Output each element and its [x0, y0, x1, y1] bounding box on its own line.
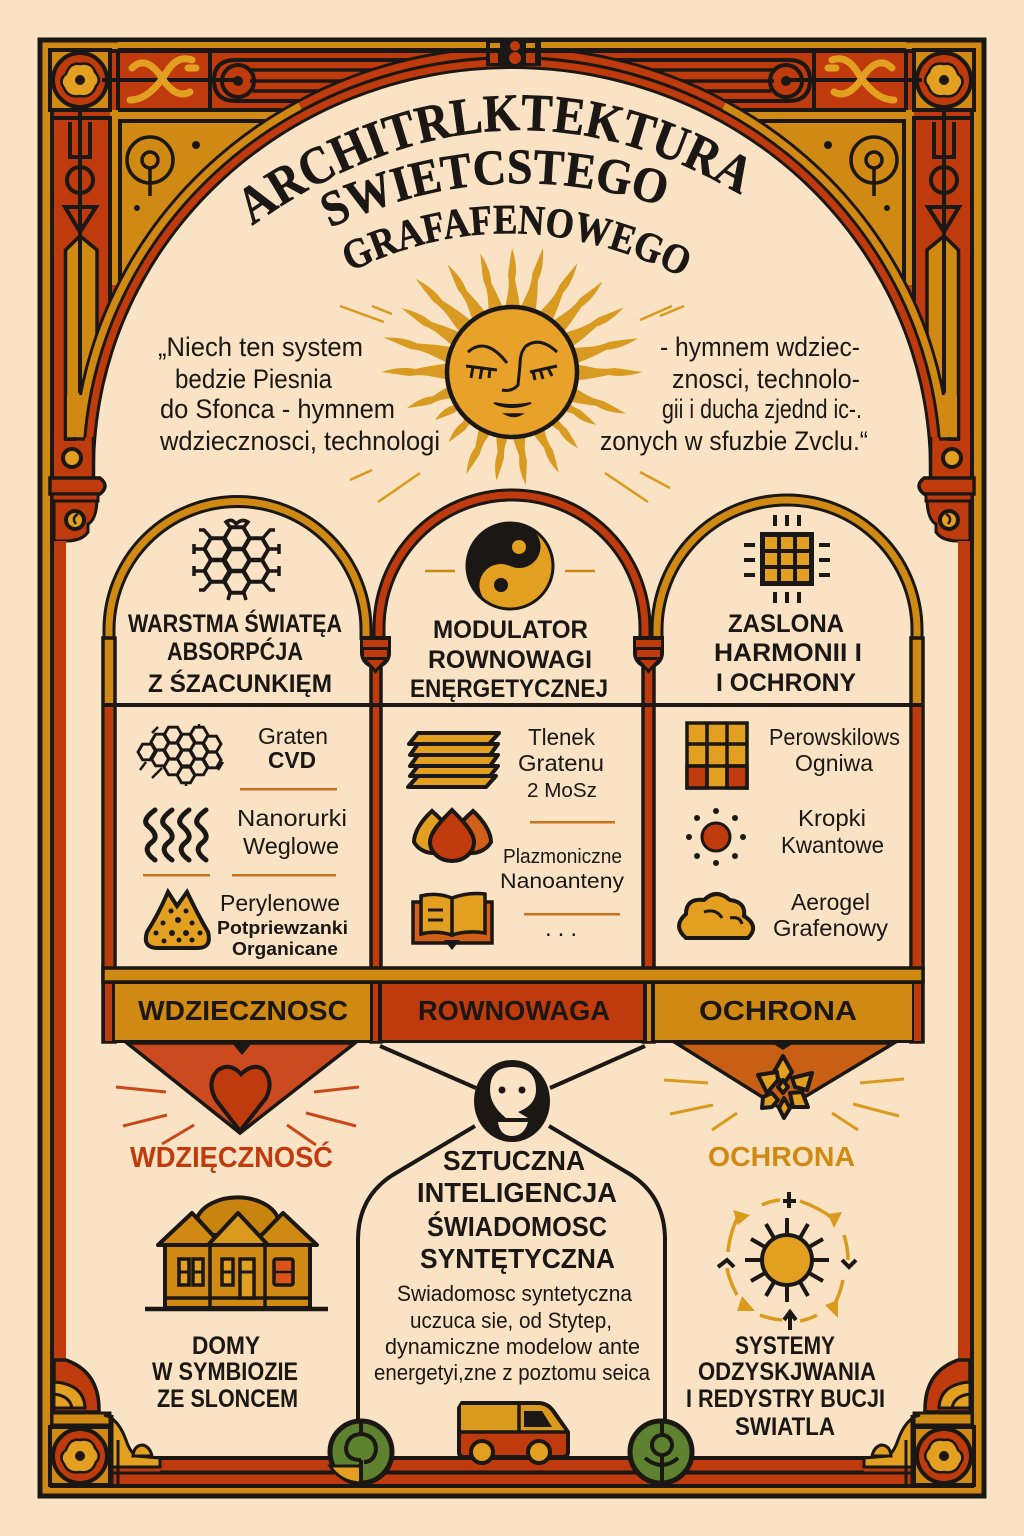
capital: right: [919, 395, 974, 547]
item text: Perylenowe: [217, 890, 348, 959]
title: GRAFAFENOWEGO: [344, 206, 690, 274]
item text: Aerogel: Aerogel: [791, 889, 870, 915]
heading: I OCHRONY: [716, 669, 856, 697]
left caption: [152, 1332, 298, 1413]
medallion: green right: [630, 1421, 692, 1483]
panel: left arch: [128, 520, 348, 959]
panel: central arch: [358, 1126, 665, 1425]
item text: Perylenowe: Potpriewzanki: [217, 918, 348, 938]
top frame stripes: [118, 38, 906, 53]
bottom border band: [52, 1458, 972, 1488]
icon: plasmonic drops: [414, 810, 491, 861]
icon: graphene hexagons: [194, 520, 279, 600]
item text: Nanorurki Weglowe: Weglowe: [243, 833, 339, 859]
triple arcade frame: [103, 495, 923, 1042]
item text: Tlenek: 2 MoSz: [527, 780, 597, 802]
item text: Perowskilows: [769, 724, 900, 776]
sun sparks: [340, 306, 684, 502]
quote: left: wdziecznosci, technologi: [159, 426, 440, 456]
ornament: bottom right corner: [864, 1360, 974, 1485]
item text: Graten CVD: CVD: [268, 747, 316, 773]
item text: Perowskilows: Ogniwa: [795, 750, 873, 776]
item text: Graten CVD: Graten: [258, 723, 328, 749]
pendant: flower: [676, 1043, 894, 1118]
rays around heart: [116, 1087, 359, 1145]
body text: dynamiczne modelow ante: [385, 1334, 640, 1359]
heading: ENĘRGETYCZNEJ: [410, 675, 608, 703]
banner label: Wdziecznosc: WDZIECZNOSC: [138, 995, 348, 1026]
item text: Kropki: Kropki: [798, 805, 866, 831]
item text: Tlenek: Gratenu: [518, 750, 604, 776]
heading: [128, 608, 342, 698]
left caption: W SYMBIOZIE: [152, 1358, 298, 1386]
banner label: Ochrona: OCHRONA: [699, 995, 857, 1026]
heading: [410, 616, 608, 703]
capital: left: [50, 395, 105, 547]
item text: Aerogel: [773, 889, 889, 941]
heading: MODULATOR: [433, 616, 588, 644]
arch: left: [109, 502, 366, 640]
right caption: [686, 1332, 885, 1441]
ornament: top right corner: [504, 50, 974, 445]
item text: Perylenowe: Organicane: [232, 939, 338, 959]
item text: Tlenek: Tlenek: [528, 724, 595, 750]
quote: right: znosci, technolo-: [672, 364, 860, 394]
ellipsis: . . .: [545, 915, 577, 942]
icon: light recovery cycle: [718, 1192, 856, 1330]
quote: right: zonych w sfuzbie Zvclu.“: [600, 426, 868, 456]
heading: [714, 610, 862, 697]
ornament: bottom left corner: [50, 1360, 160, 1485]
item text: Kropki: [781, 805, 884, 858]
heading: ZASLONA: [728, 610, 844, 638]
body text: uczuca sie, od Stytep,: [410, 1308, 612, 1333]
body text: Swiadomosc syntetyczna: [397, 1281, 633, 1306]
item text: Plazmoniczne: Nanoanteny: [500, 870, 625, 893]
icon: carbon nanotubes: [146, 810, 206, 860]
icon: perylene pile: [146, 892, 209, 948]
left caption: ZE SLONCEM: [157, 1385, 298, 1413]
heading: INTELIGENCJA: [417, 1177, 617, 1208]
rays around flower: [664, 1079, 904, 1130]
pendant: heart: [127, 1043, 355, 1133]
quote: left: do Sfonca - hymnem: [160, 394, 395, 424]
item text: Plazmoniczne: [500, 846, 625, 893]
heading: WARSTMA ŚWIATĘA: [128, 608, 342, 638]
heading: [417, 1145, 617, 1274]
item text: Nanorurki Weglowe: Nanorurki: [237, 805, 347, 831]
icon: crumpled CVD graphene: [138, 724, 223, 786]
icon: house: [145, 1197, 328, 1309]
icon: perovskite grid: [687, 723, 747, 788]
item text: Tlenek: [518, 724, 604, 802]
icon: delivery van: [459, 1403, 568, 1463]
ornament: top left corner: [50, 50, 520, 445]
icon: aerogel cloud: [679, 894, 753, 938]
left caption: DOMY: [192, 1332, 260, 1360]
right caption: I REDYSTRY BUCJI: [686, 1385, 885, 1413]
heading: Z ŚZACUNKIĘM: [148, 668, 332, 698]
title: ARCHITRLKTEKTURA: [244, 94, 746, 226]
medallion: green left: [330, 1421, 392, 1483]
quote: left: „Niech ten system: [158, 332, 363, 362]
right caption: SWIATLA: [735, 1413, 835, 1441]
right caption: SYSTEMY: [735, 1332, 835, 1360]
quote: right: - hymnem wdziec-: [660, 332, 860, 362]
heading: HARMONII I: [714, 639, 862, 667]
heading: ROWNOWAGI: [428, 646, 592, 674]
quote: left: [158, 332, 440, 456]
item text: Plazmoniczne: Plazmoniczne: [503, 846, 622, 868]
icon: open book: [413, 894, 492, 950]
central figure: AI head: [380, 1046, 645, 1142]
item text: Perylenowe: Perylenowe: [220, 890, 340, 916]
quote: left: bedzie Piesnia: [175, 364, 333, 394]
quote: right: [600, 332, 868, 456]
heading: SZTUCZNA: [443, 1145, 585, 1176]
item text: Aerogel: Grafenowy: [773, 915, 889, 941]
body text: energetyi,zne z poztomu seica: [374, 1360, 651, 1385]
icon: graphene oxide layers: [408, 733, 499, 787]
heading: SYNTĘTYCZNA: [420, 1243, 615, 1274]
columns: [103, 636, 923, 1042]
arch: centre: [379, 495, 645, 640]
banner label: Rownowaga: ROWNOWAGA: [418, 995, 610, 1026]
right heading: Ochrona: OCHRONA: [708, 1141, 855, 1172]
left heading: Wdziecznosc: WDZIĘCZNOSĆ: [130, 1140, 333, 1174]
icon: sun: [381, 246, 643, 486]
banner row: [103, 982, 923, 1043]
title: SWIETCSTEGO: [321, 150, 666, 226]
body text: [374, 1281, 651, 1385]
arch: right: [657, 500, 917, 640]
right caption: ODZYSKJWANIA: [698, 1358, 876, 1386]
item text: Graten CVD: [258, 723, 328, 773]
item text: Kropki: Kwantowe: [781, 832, 884, 858]
icon: yin yang: [425, 509, 595, 614]
heading: ŚWIADOMOSC: [427, 1211, 607, 1242]
panel: centre arch: [408, 509, 625, 950]
item text: Perowskilows: Perowskilows: [769, 724, 900, 750]
ornament: top centre: [486, 40, 541, 66]
icon: quantum dots: [686, 808, 746, 866]
icon: chip: [744, 515, 830, 603]
panel: right arch: [679, 515, 900, 941]
item text: Nanorurki Weglowe: [237, 805, 347, 859]
quote: right: gii i ducha zjednd ic-.: [662, 394, 862, 424]
heading: ABSORPĆJA: [167, 636, 303, 666]
